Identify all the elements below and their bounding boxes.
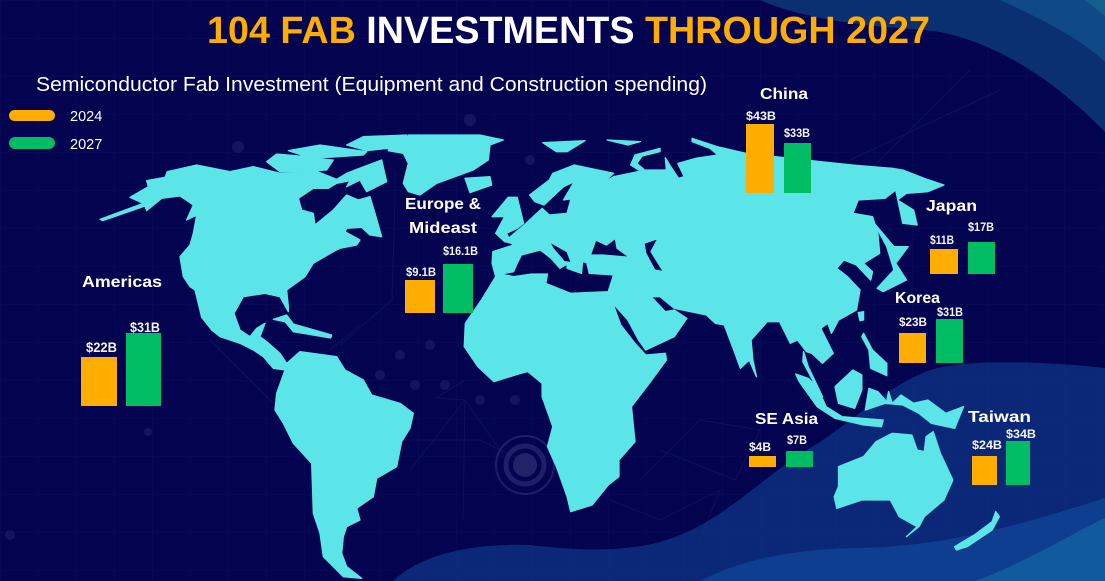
bottom waves	[393, 362, 1105, 581]
chart: Europe and Mideast: Mideast	[409, 220, 478, 237]
world map	[100, 135, 999, 578]
chart: Japan	[926, 198, 995, 274]
chart: Korea: $23B	[899, 317, 927, 329]
chart: China	[746, 86, 811, 193]
Malay peninsula	[803, 352, 822, 397]
Kola arc	[631, 148, 660, 170]
legend: 2027: 2027	[70, 137, 102, 153]
Japan	[874, 223, 908, 292]
chart: China: $33B	[784, 128, 810, 140]
decorative target circle	[496, 436, 554, 494]
Borneo	[835, 370, 862, 408]
map: Americas	[100, 135, 503, 578]
chart: Americas: Americas	[82, 274, 162, 291]
chart: China: China	[760, 86, 808, 103]
chart: Europe and Mideast	[405, 196, 481, 313]
chart: Europe and Mideast: $16.1B	[443, 246, 478, 258]
chart: Americas: $22B	[86, 340, 117, 355]
Cuba	[273, 315, 332, 338]
subtitle: Semiconductor Fab Investment (Equipment and Construction spending)	[36, 74, 707, 96]
chart: Korea: Korea	[895, 290, 940, 307]
top right wave	[760, 0, 1105, 132]
chart: Korea: $31B	[937, 307, 963, 319]
chart: Japan: Japan	[926, 198, 977, 215]
chart: Japan: $17B	[968, 222, 994, 234]
chart: China: $43B	[746, 111, 776, 123]
legend	[9, 109, 102, 153]
Svalbard	[543, 141, 585, 152]
chart: SE Asia: $7B	[787, 435, 807, 447]
Philippines	[862, 333, 887, 376]
United Kingdom and Ireland	[492, 197, 524, 243]
New Guinea and islands	[865, 388, 964, 428]
chart: Japan: $11B	[930, 235, 954, 247]
Sumatra and Java	[796, 374, 883, 427]
New Zealand	[955, 512, 999, 550]
Taiwan island	[858, 312, 864, 321]
chart: Taiwan: $24B	[972, 440, 1002, 452]
Baffin island	[347, 160, 387, 192]
chart: Taiwan	[968, 409, 1036, 485]
map: Eurasia, Africa, Oceania	[464, 138, 999, 550]
title: 104 FAB INVESTMENTS THROUGH 2027	[207, 10, 930, 52]
legend: 2024: 2024	[70, 109, 102, 125]
chart: Korea	[895, 290, 963, 363]
Eurasia and Africa	[464, 138, 944, 512]
Greenland	[388, 135, 503, 195]
chart: SE Asia: $4B	[749, 442, 771, 454]
Ellesmere island	[347, 135, 407, 151]
Australia	[834, 432, 953, 537]
chart: Europe and Mideast: Europe &	[405, 196, 481, 213]
Novaya island	[607, 140, 640, 145]
chart: Taiwan: Taiwan	[968, 409, 1031, 426]
Arctic islands	[267, 145, 367, 172]
North and South America	[100, 165, 413, 578]
chart: SE Asia: SE Asia	[755, 411, 818, 428]
Iceland	[465, 177, 492, 193]
chart: Americas: $31B	[130, 320, 160, 335]
chart: Americas	[81, 274, 162, 406]
chart: Taiwan: $34B	[1006, 429, 1036, 441]
chart: Europe and Mideast: $9.1B	[406, 267, 436, 279]
chart: SE Asia	[749, 411, 818, 467]
